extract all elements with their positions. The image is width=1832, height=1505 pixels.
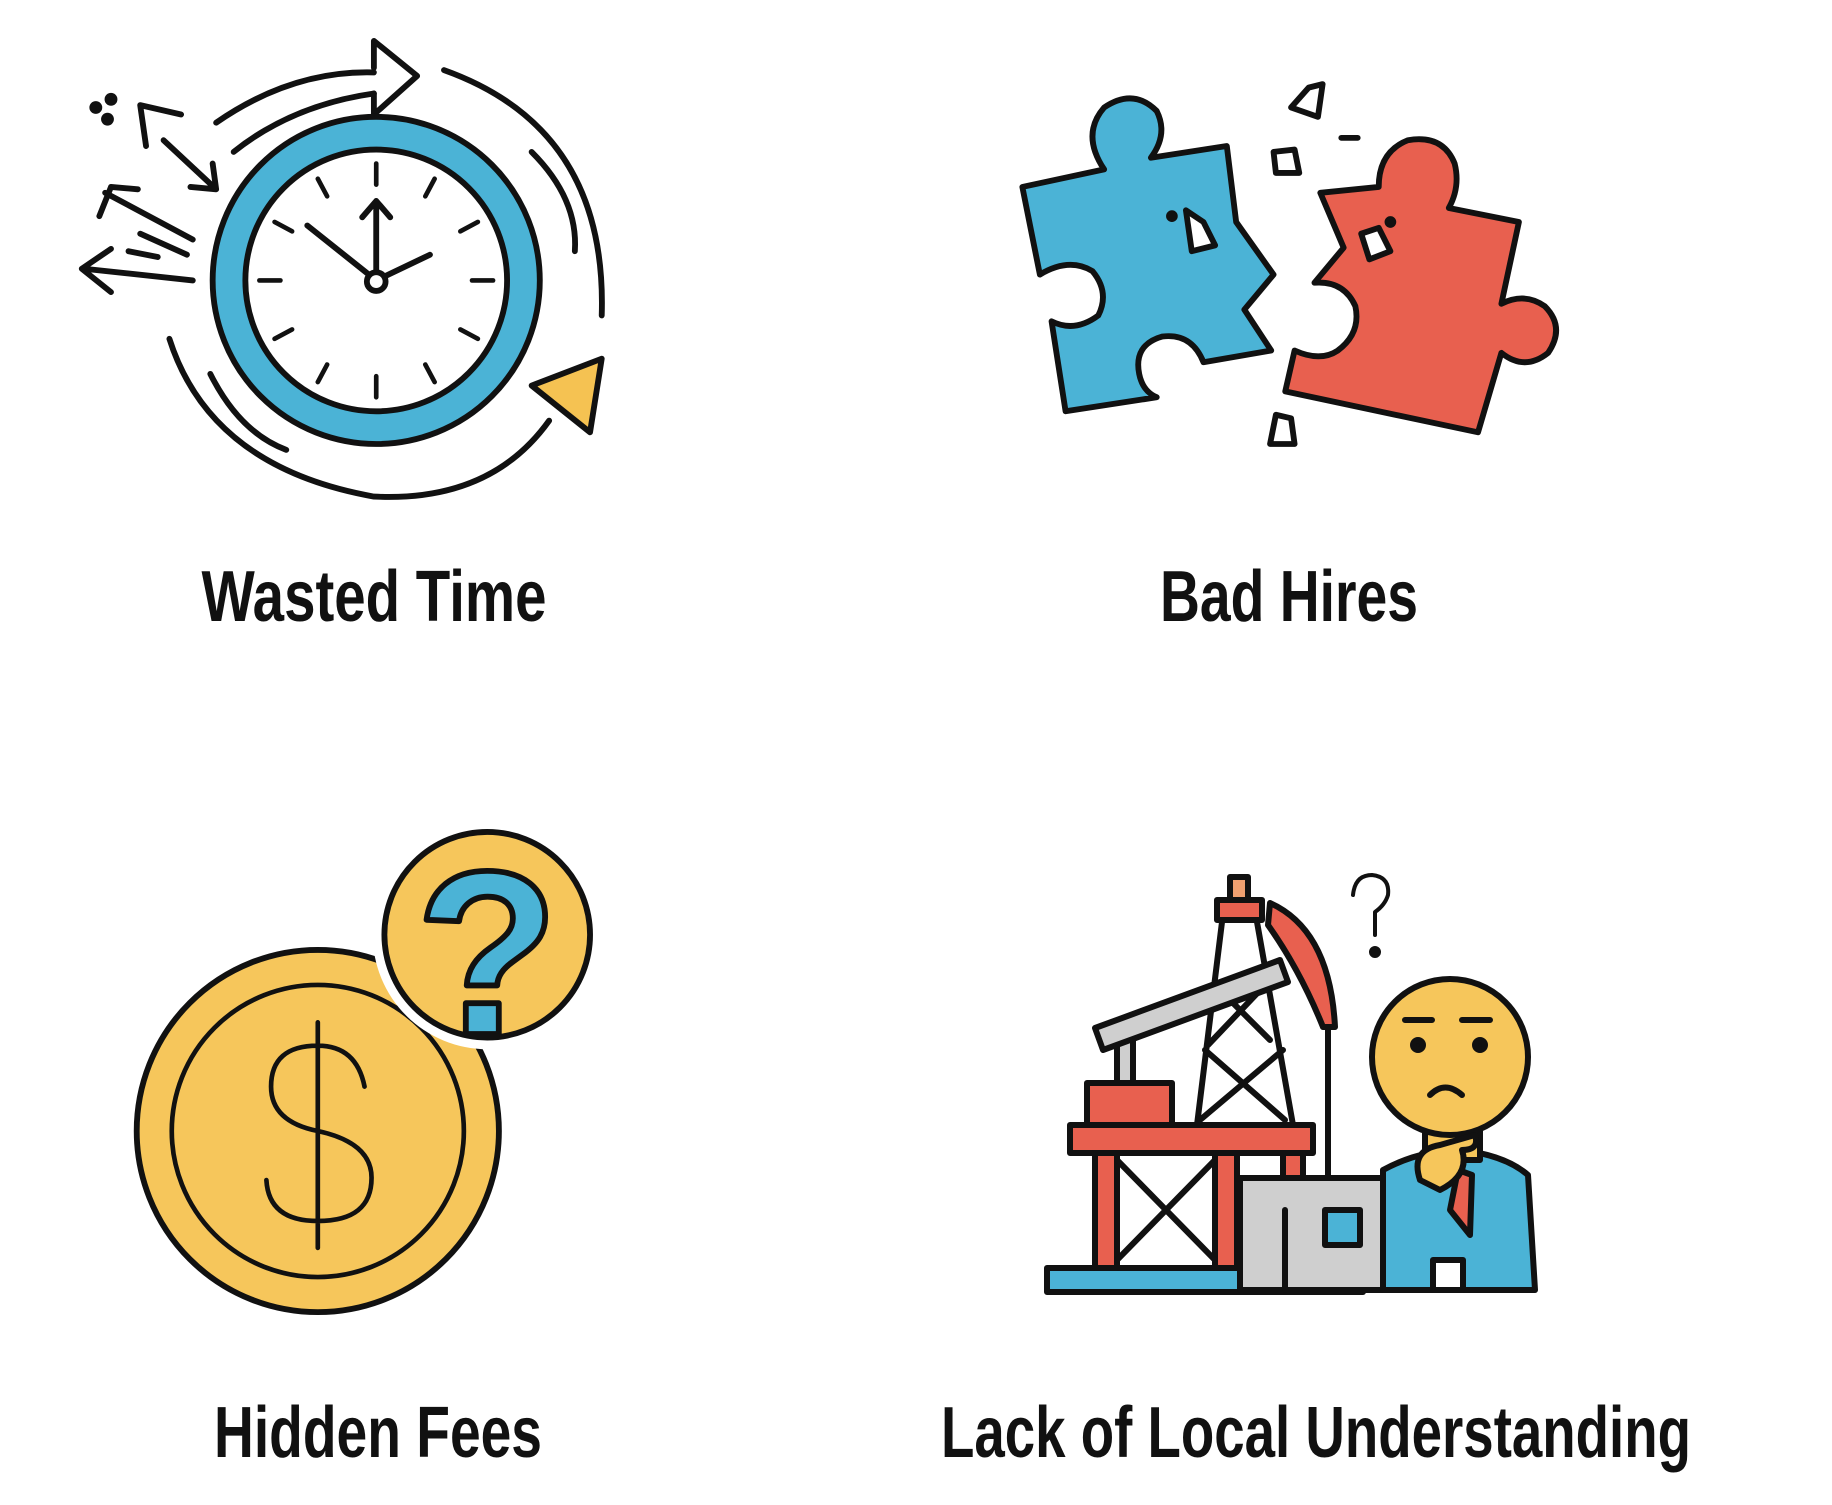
label: Hidden Fees: Hidden Fees <box>214 1393 542 1473</box>
label: Wasted Time: Wasted Time <box>202 557 546 637</box>
icon: broken puzzle pieces <box>1022 84 1556 444</box>
label: Bad Hires: Bad Hires <box>1160 557 1418 637</box>
icon: clock with arrows <box>82 41 602 497</box>
icon: coin with question mark: ? <box>416 822 559 1084</box>
icon: coin with question mark <box>137 820 602 1312</box>
icon: oil rig with confused man <box>1047 875 1535 1292</box>
